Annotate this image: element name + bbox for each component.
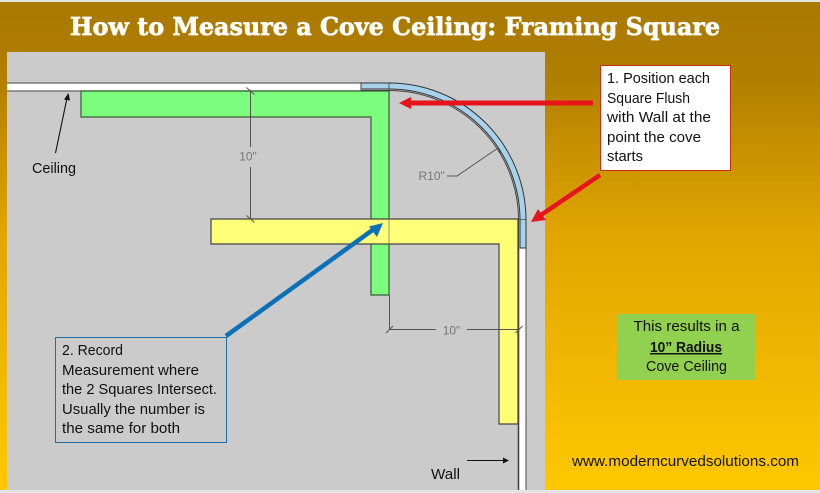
title: How to Measure a Cove Ceiling: Framing Square bbox=[70, 12, 720, 41]
callout: step 2: Measurement where bbox=[62, 362, 199, 379]
callout: step 2: the 2 Squares Intersect. bbox=[62, 381, 217, 398]
callout: step 1: Square Flush bbox=[607, 90, 690, 107]
radius label: R10" bbox=[418, 169, 445, 183]
cove strip bbox=[361, 83, 526, 248]
callout: step 2 bbox=[56, 338, 226, 442]
callout: step 2: the same for both bbox=[62, 420, 180, 437]
panel: cove diagram bbox=[7, 52, 545, 490]
callout: step 1 bbox=[600, 66, 730, 170]
result box: 10” Radius bbox=[650, 339, 722, 356]
radius label bbox=[418, 146, 501, 183]
yellow framing square bbox=[211, 219, 518, 424]
callout: step 2: Usually the number is bbox=[62, 401, 205, 418]
result box: This results in a bbox=[634, 318, 740, 335]
horizontal dimension 10 inch bbox=[386, 295, 522, 338]
callout: step 1: 1. Position each bbox=[607, 70, 710, 87]
wall label: Wall bbox=[431, 466, 460, 483]
horizontal dimension 10 inch: 10" bbox=[443, 324, 460, 338]
callout: step 1: with Wall at the bbox=[606, 109, 711, 126]
vertical dimension 10 inch: 10" bbox=[239, 150, 257, 164]
arrow: blue to intersection bbox=[226, 223, 383, 336]
callout: step 2: 2. Record bbox=[62, 342, 123, 359]
arrow: red to cove start wall bbox=[531, 175, 600, 222]
result box: Cove Ceiling bbox=[646, 358, 727, 375]
callout: step 1: starts bbox=[607, 148, 643, 165]
ceiling band bbox=[7, 83, 362, 91]
arrow: red to cove start top bbox=[399, 97, 593, 109]
result box bbox=[617, 314, 755, 380]
ceiling label bbox=[32, 93, 76, 177]
wall label bbox=[431, 458, 509, 483]
website url: www.moderncurvedsolutions.com bbox=[571, 453, 799, 470]
vertical dimension 10 inch bbox=[239, 88, 257, 222]
wall band bbox=[518, 248, 526, 490]
ceiling label: Ceiling bbox=[32, 160, 76, 177]
green framing square bbox=[81, 91, 389, 295]
callout: step 1: point the cove bbox=[607, 129, 701, 146]
